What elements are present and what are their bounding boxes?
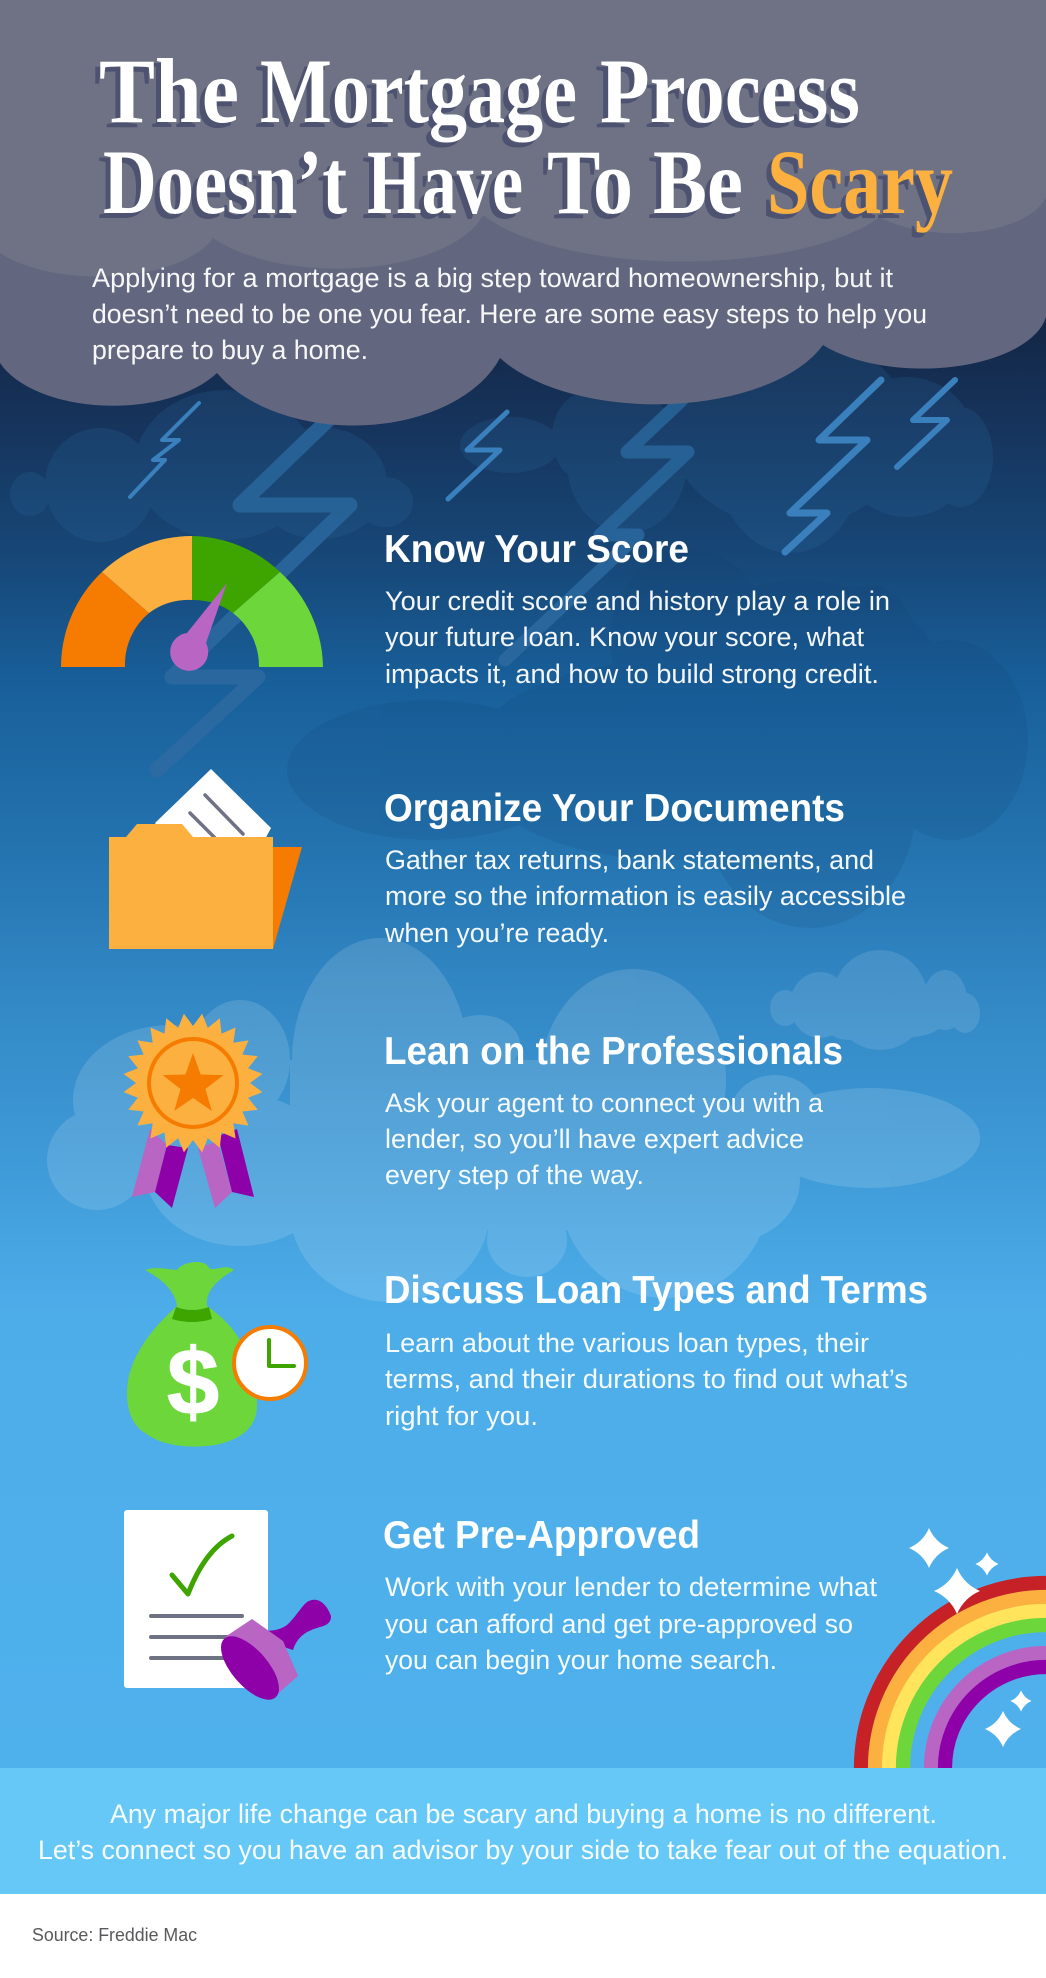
text: Organize Your Documents: Gather tax returns, bank statements, and [385,845,874,875]
text: Get Pre-Approved: Work with your lender to determine what [385,1572,878,1602]
icon: rainbow [861,1583,1046,1953]
storm cloud: back [0,0,1046,277]
intro text: Applying for a mortgage is a big step toward homeownership, but it [92,263,893,293]
title: The [99,40,239,142]
big lightning bolt left [157,420,350,770]
background cloud: dark left [10,390,413,542]
text: Know Your Score: Know Your Score [384,528,689,571]
text: Get Pre-Approved: Get Pre-Approved [383,1514,700,1557]
white source strip [0,1894,1046,1978]
text: Know Your Score: Your credit score and history play a role in [385,586,890,616]
text: Organize Your Documents: Organize Your Documents [384,787,845,830]
intro text: doesn’t need to be one you fear. Here are some easy steps to help you [92,299,927,329]
text: Get Pre-Approved: you can afford and get pre-approved so [385,1609,853,1639]
icon: approved document with stamp [124,1510,331,1709]
title [99,40,953,233]
text: Organize Your Documents: more so the information is easily accessible [385,881,906,911]
storm cloud: front [0,0,1046,426]
title: Mortgage [260,40,577,142]
text: Organize Your Documents [384,787,906,948]
text: Lean on the Professionals: lender, so you’ll have expert advice [385,1124,804,1154]
text: Organize Your Documents: when you’re ready. [384,918,609,948]
icon: document folder [109,769,302,949]
text: Discuss Loan Types and Terms: right for you. [385,1401,538,1431]
text: Discuss Loan Types and Terms: terms, and their durations to find out what’s [385,1364,908,1394]
intro text: prepare to buy a home. [92,335,368,365]
small lightning bolt d [897,380,955,467]
text: Get Pre-Approved: you can begin your home search. [385,1645,777,1675]
text: Discuss Loan Types and Terms: Learn about the various loan types, their [385,1328,869,1358]
title: Have [367,131,523,233]
text: Know Your Score: impacts it, and how to build strong credit. [385,659,879,689]
background cloud: small light [770,950,980,1050]
text: Lean on the Professionals [384,1030,843,1190]
text: Discuss Loan Types and Terms [384,1269,928,1431]
background cloud: large light [47,938,980,1302]
text: Know Your Score [384,528,890,689]
big lightning bolt middle [505,400,688,660]
title: Doesn’t [103,131,347,233]
text: Lean on the Professionals: Lean on the Professionals [384,1030,843,1073]
icon: money bag with clock: $ [167,1329,219,1434]
title: Process [600,40,860,142]
icon: money bag with clock [127,1262,306,1447]
footer band [0,1768,1046,1894]
text: Discuss Loan Types and Terms: Discuss Loan Types and Terms [384,1269,928,1312]
small lightning bolt c [785,380,881,552]
text: Lean on the Professionals: every step of the way. [385,1160,644,1190]
title: To [547,131,633,233]
footer band: Let’s connect so you have an advisor by your side to take fear out of the equation. [38,1835,1008,1865]
background cloud: dark right [460,333,993,553]
footer band: Any major life change can be scary and buying a home is no different. [110,1799,937,1829]
title: Scary [767,131,953,233]
icon: award ribbon [124,1014,262,1208]
text: Lean on the Professionals: Ask your agent to connect you with a [385,1088,824,1118]
text: Know Your Score: your future loan. Know your score, what [385,622,864,652]
small lightning bolt a [130,403,199,497]
text: Get Pre-Approved [383,1514,878,1675]
title: Be [653,131,743,233]
background cloud: mid darker [287,550,1028,928]
small lightning bolt b [448,412,507,499]
icon: credit score gauge [61,536,323,671]
intro text [92,263,927,365]
white source strip: Source: Freddie Mac [32,1925,197,1945]
icon: sparkles [909,1528,1032,1747]
